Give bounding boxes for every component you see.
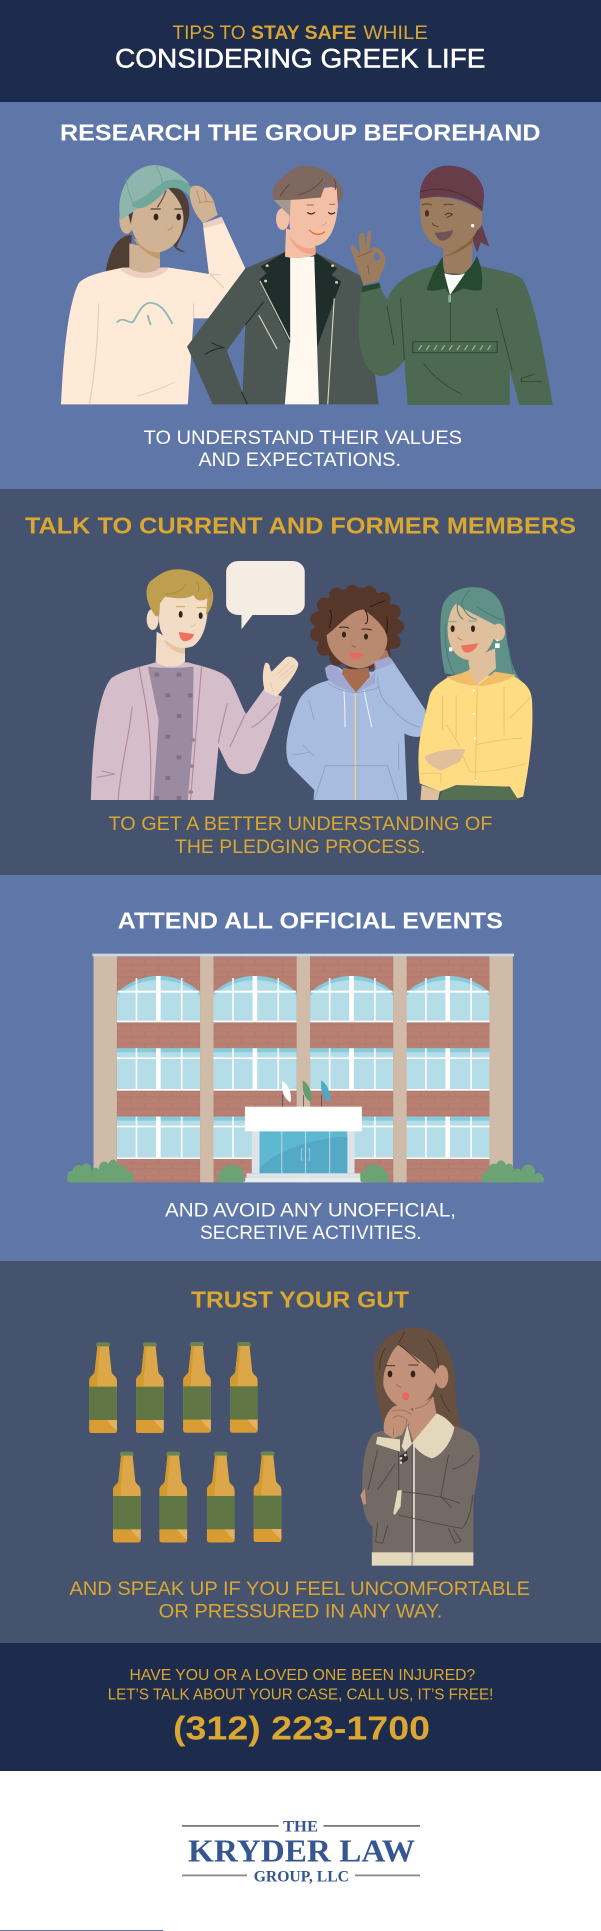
caption: research: TO UNDERSTAND THEIR VALUES <box>144 427 462 449</box>
panel: research the group <box>0 102 601 489</box>
caption: attend <box>165 1200 456 1244</box>
panel: attend official events <box>0 875 601 1261</box>
illustration: thinking woman <box>360 1327 480 1566</box>
phone number: (312) 223-1700 <box>173 1709 430 1746</box>
heading: trust: TRUST YOUR GUT <box>191 1287 410 1313</box>
figure: woman in hoodie <box>286 585 425 800</box>
title line two: CONSIDERING GREEK LIFE <box>115 44 486 74</box>
roof line <box>92 954 514 956</box>
call to action text: HAVE YOU OR A LOVED ONE BEEN INJURED? <box>130 1667 476 1684</box>
lower windows <box>117 1117 489 1159</box>
panel: call to action <box>0 1643 601 1771</box>
logo: the kryder law group <box>182 1819 420 1885</box>
figure: man in leather jacket <box>187 166 379 404</box>
title line one: WHILE <box>363 22 428 44</box>
title line one <box>172 22 428 44</box>
caption: trust: AND SPEAK UP IF YOU FEEL UNCOMFORTABLE <box>69 1578 530 1600</box>
middle windows <box>117 1048 489 1091</box>
caption: attend: AND AVOID ANY UNOFFICIAL, <box>165 1200 456 1222</box>
logo: the kryder law group: THE <box>283 1819 318 1836</box>
illustration: three students <box>61 165 553 405</box>
figure: man in cardigan <box>91 569 298 800</box>
speech bubble <box>226 561 305 629</box>
heading: research: RESEARCH THE GROUP BEFOREHAND <box>60 120 540 146</box>
panel: header <box>0 0 601 102</box>
figure: girl with cap <box>61 165 245 404</box>
panel: trust your gut <box>0 1261 601 1643</box>
caption: trust: OR PRESSURED IN ANY WAY. <box>159 1601 442 1623</box>
illustration: three people talking <box>91 561 532 800</box>
figure: man with ok gesture <box>351 166 553 405</box>
heading: attend: ATTEND ALL OFFICIAL EVENTS <box>118 907 503 933</box>
caption: talk: TO GET A BETTER UNDERSTANDING OF <box>108 813 493 835</box>
illustration: campus building <box>67 954 544 1183</box>
logo: the kryder law group: KRYDER LAW <box>188 1833 415 1869</box>
panel: talk to members <box>0 489 601 875</box>
caption: talk: THE PLEDGING PROCESS. <box>175 836 426 858</box>
call to action text: LET’S TALK ABOUT YOUR CASE, CALL US, IT’S FREE! <box>108 1686 493 1703</box>
caption: research <box>144 427 462 471</box>
illustration: bottles <box>89 1342 281 1542</box>
call to action text <box>108 1667 493 1703</box>
caption: attend: SECRETIVE ACTIVITIES. <box>200 1222 422 1244</box>
title line one: TIPS TO <box>172 22 246 44</box>
caption: research: AND EXPECTATIONS. <box>198 449 401 471</box>
flags <box>282 1080 330 1107</box>
columns <box>94 956 513 1182</box>
heading: talk: TALK TO CURRENT AND FORMER MEMBERS <box>25 512 576 538</box>
bushes <box>67 1160 544 1183</box>
caption: talk <box>108 813 493 858</box>
title line one: STAY SAFE <box>251 22 356 44</box>
entrance <box>240 1107 367 1182</box>
figure: woman in yellow <box>418 587 532 800</box>
logo: the kryder law group: GROUP, LLC <box>254 1868 349 1885</box>
caption: trust <box>69 1578 530 1623</box>
upper arched windows <box>117 976 489 1022</box>
